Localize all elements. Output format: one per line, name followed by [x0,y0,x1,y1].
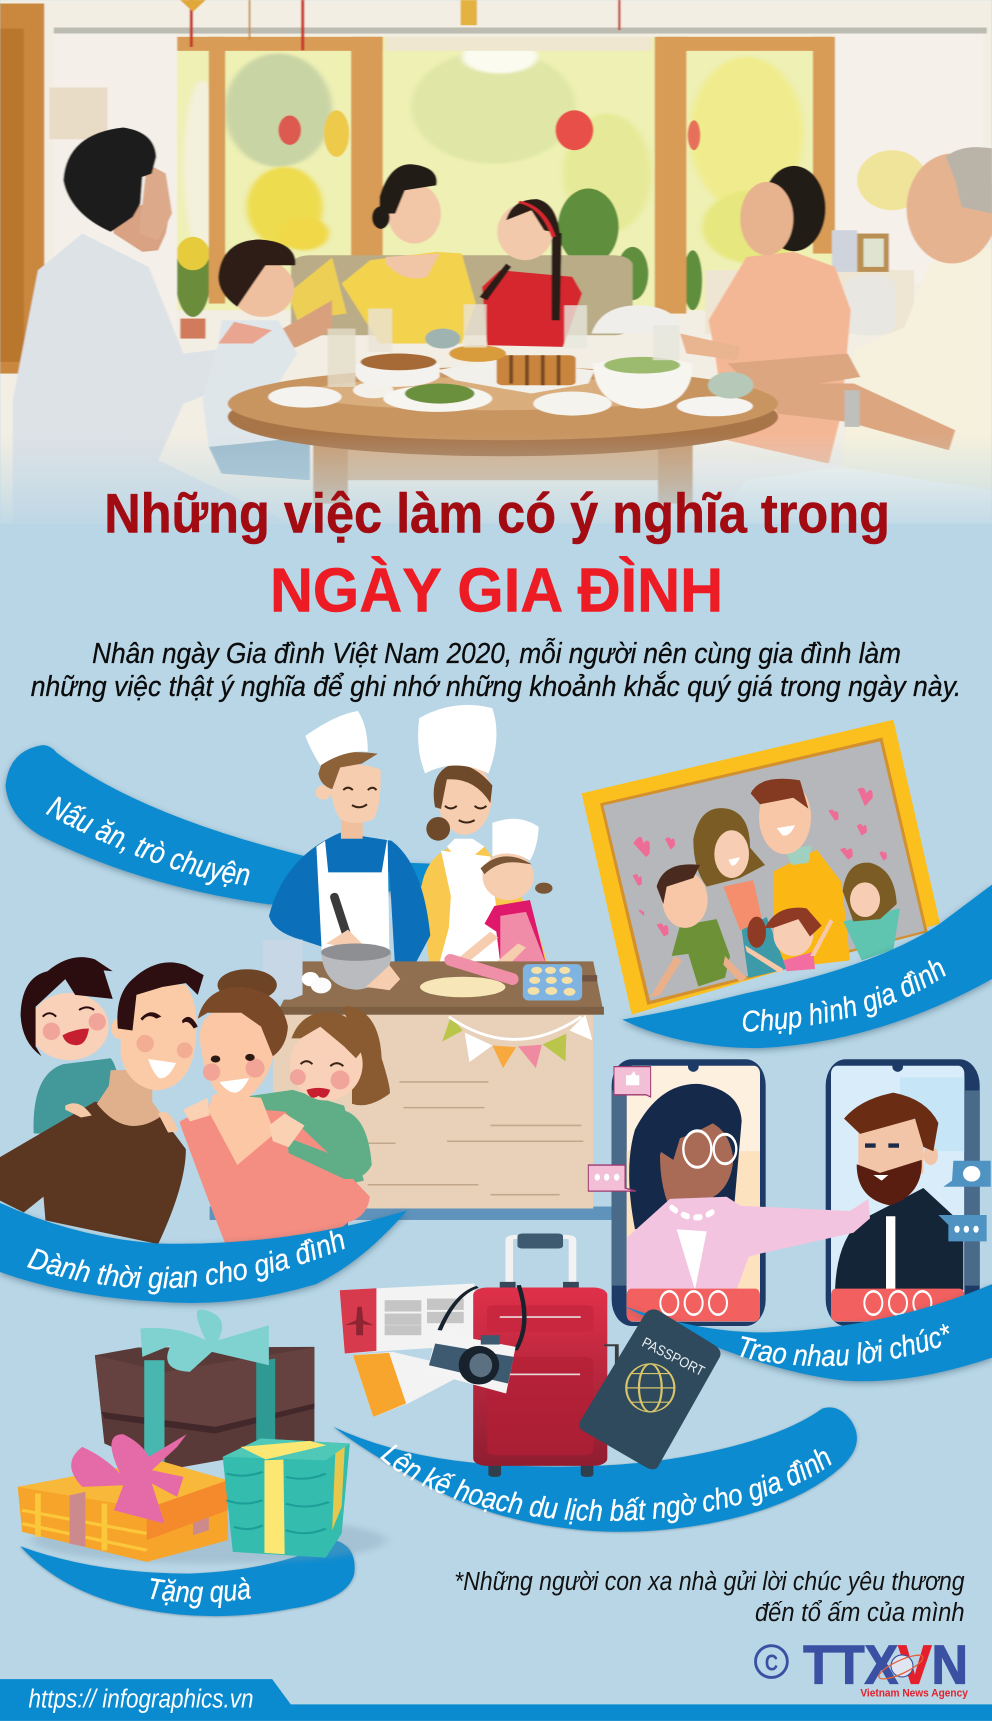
illustration: suitcase, tickets, camera and passport [340,1234,721,1477]
hero photo: family at dining table [0,0,992,524]
ribbon: sending wishes: Trao nhau lời chúc* [740,1324,950,1366]
woman caller [629,1084,742,1229]
footer bar with url tab [0,1679,992,1721]
logo: copyright mark and TTXVN: TTXVN [803,1634,968,1696]
ribbon: family time: Dành thời gian cho gia đình [27,1230,345,1294]
male chef [269,833,430,975]
right phone [826,1059,980,1326]
baking tray [523,964,582,1000]
man caller [835,1188,963,1290]
older girl [843,908,900,960]
teal bow [140,1309,269,1372]
ribbon: gifts [20,1540,355,1616]
passport label: PASSPORT [639,1335,707,1380]
grandfather [841,247,992,490]
photo fade into background [0,434,992,538]
title: Những việc làm có ý nghĩa trong [104,481,890,544]
counter top [277,961,604,1014]
intro text [31,638,961,703]
girl's body and ponytail behind mother [210,1090,364,1185]
girl [482,270,582,347]
footnote [454,1566,965,1627]
boy [202,320,310,447]
mother [342,252,476,344]
grandmother [709,252,851,464]
ribbon: cooking [2,744,431,910]
pink bow [71,1434,187,1524]
suitcase body [473,1288,607,1466]
footer bar with url tab: https:// infographics.vn [29,1684,253,1714]
small girl [783,952,815,971]
control bar [627,1289,760,1321]
plates and food [268,386,342,408]
tickets [340,1284,474,1354]
travel ribbon text: Lên kế hoạch du lịch bất ngờ cho gia đình [380,1444,832,1524]
ribbon: family time [0,1202,407,1309]
father [0,1102,186,1244]
female chef [421,847,548,963]
dough and rolling pin [420,977,505,997]
illustration: hugging family of four [0,957,390,1244]
hearts [633,788,887,937]
brown gift [95,1347,314,1470]
intro text: Nhân ngày Gia đình Việt Nam 2020, mỗi người nên cùng gia đình làm [92,638,901,670]
woman's arm reaching across phones [733,1199,870,1260]
mum [723,880,763,930]
whisk [329,892,352,940]
illustration: two phones with video call [588,1059,991,1326]
milk carton [263,940,303,1000]
mother [180,1104,370,1244]
footnote: đến tổ ấm của mình [755,1597,965,1627]
dad [773,850,850,969]
title: NGÀY GIA ĐÌNH [270,555,723,625]
passport [579,1309,721,1469]
ribbon: sending wishes [624,1284,992,1388]
orange gift [18,1460,228,1562]
ribbon: family photo [622,884,992,1054]
girl chef [484,900,546,963]
girl's head and arm [290,1028,363,1101]
dining table [313,440,348,504]
logo: copyright mark and TTXVN: Vietnam News Agency [860,1688,969,1700]
logo: copyright mark and TTXVN: C [765,1649,778,1675]
illustration: gift boxes [18,1309,386,1564]
title [104,481,890,625]
left phone [612,1059,766,1326]
gifts ribbon text: Tặng quà [150,1577,251,1609]
boy [672,919,730,986]
camera [440,1285,524,1350]
photo frame with family picture [582,720,940,1015]
ribbon: cooking: Nấu ăn, trò chuyện [46,796,250,888]
ribbon: travel plans [333,1407,857,1532]
teal gift [223,1439,350,1558]
bunting [442,1017,463,1042]
ribbon: family photo: Chụp hình gia đình [742,960,946,1035]
mixing bowl [321,946,392,990]
chat bubbles [614,1067,651,1097]
illustration: family cooking at kitchen counter [210,705,613,1220]
man on the left [13,234,291,524]
boy [33,1058,123,1137]
